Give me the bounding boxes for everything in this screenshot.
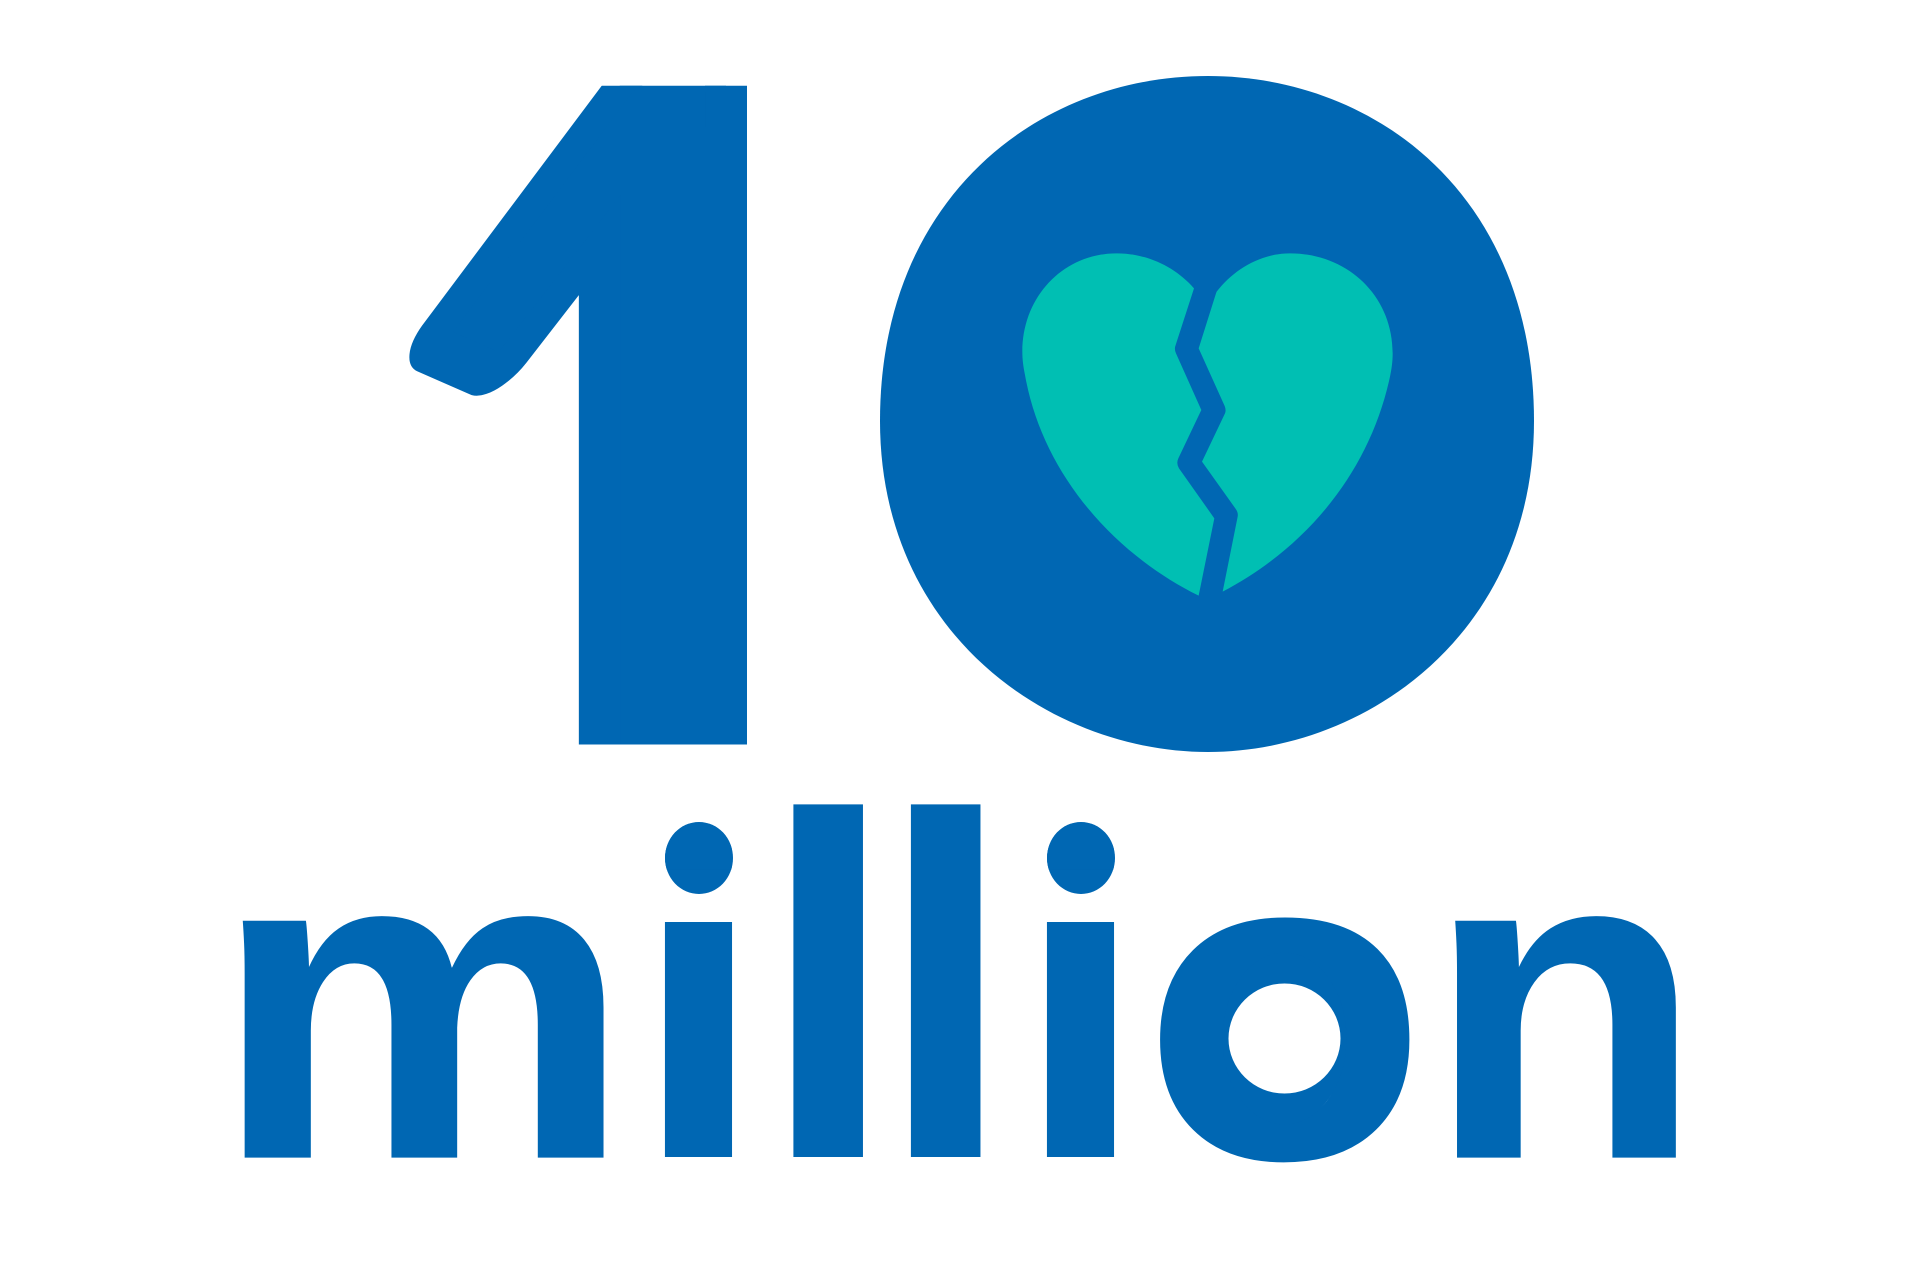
word: million: l xyxy=(758,718,899,1262)
word: million: o xyxy=(1142,754,1428,1253)
word: million xyxy=(242,804,1676,1162)
word: million: m xyxy=(212,754,632,1252)
icon: numeral zero with broken heart xyxy=(880,76,1534,752)
word: million: n xyxy=(1426,755,1703,1252)
word: million: i xyxy=(631,739,767,1256)
word: million: i xyxy=(1013,739,1149,1256)
word: million: l xyxy=(876,718,1016,1262)
